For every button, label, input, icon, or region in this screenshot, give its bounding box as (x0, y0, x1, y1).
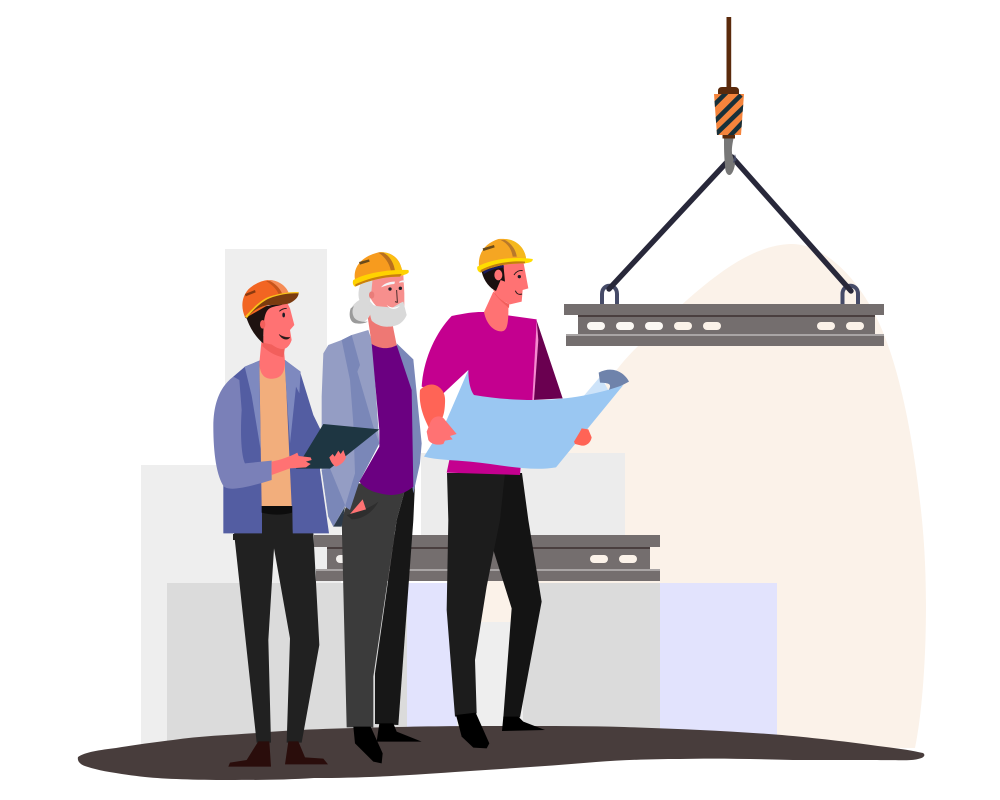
crane cable (726, 17, 731, 88)
right hand (574, 428, 592, 446)
lapel shade (342, 335, 379, 510)
ground shadow (78, 726, 924, 780)
jacket body (223, 360, 329, 533)
beard (369, 300, 407, 327)
hook collar (722, 135, 735, 138)
hook tip (733, 154, 736, 163)
orange shirt (259, 362, 292, 506)
jacket lining (333, 507, 345, 527)
lapels (245, 361, 261, 450)
upper steel beam (564, 304, 884, 346)
shirt shadow side (533, 321, 563, 400)
striped pulley block (714, 94, 744, 135)
forearm (420, 384, 445, 430)
belt (262, 506, 292, 515)
hard hat (353, 252, 409, 287)
lead engineer upper body (420, 239, 629, 475)
left hand (427, 416, 457, 445)
right ring (842, 286, 858, 304)
magenta shirt (422, 312, 537, 475)
purple shirt (359, 343, 413, 495)
peach patch behind legs (457, 581, 527, 622)
trousers top (233, 506, 312, 540)
lead engineer legs (447, 473, 545, 748)
hands (272, 453, 312, 475)
left ring (602, 286, 617, 304)
tall light building (225, 249, 327, 469)
ear (260, 320, 265, 329)
older engineer upper body (322, 252, 422, 527)
left light building (141, 465, 341, 745)
neck (259, 335, 285, 379)
clipboard (296, 424, 379, 469)
young engineer upper body (213, 280, 379, 540)
ear (494, 270, 502, 280)
lavender block (400, 583, 777, 738)
hair (247, 304, 284, 343)
jacket left (322, 330, 379, 527)
hook (724, 138, 735, 175)
hair (350, 278, 373, 323)
eye, brow and mouth (514, 271, 523, 275)
left sling (609, 162, 727, 289)
gray block left (167, 583, 407, 743)
blueprint sheet (424, 370, 623, 469)
peach blob (480, 244, 926, 748)
background shapes (141, 244, 926, 748)
neck (484, 292, 508, 331)
gray block right (523, 583, 660, 735)
young engineer legs (228, 520, 328, 767)
brows and eyes (381, 280, 405, 287)
eye, brow and mouth (279, 308, 287, 311)
jacket hem shade (322, 468, 345, 527)
head (493, 262, 528, 304)
lower steel beam (314, 535, 660, 581)
hard hat (242, 280, 299, 319)
pocket hand (350, 499, 366, 514)
right sling (732, 157, 851, 291)
head (263, 302, 294, 349)
sleeve (213, 377, 272, 489)
neck (367, 310, 397, 348)
blueprint roll (584, 370, 629, 396)
pocket shadow (347, 502, 378, 519)
face (371, 275, 404, 313)
older engineer legs (342, 483, 422, 763)
hard hat (477, 239, 533, 273)
hair (482, 264, 505, 291)
hook cap (718, 87, 739, 94)
jacket right (397, 343, 422, 493)
right light building (421, 453, 625, 536)
pale block center (457, 622, 527, 737)
crane hook and rigging (602, 17, 858, 304)
